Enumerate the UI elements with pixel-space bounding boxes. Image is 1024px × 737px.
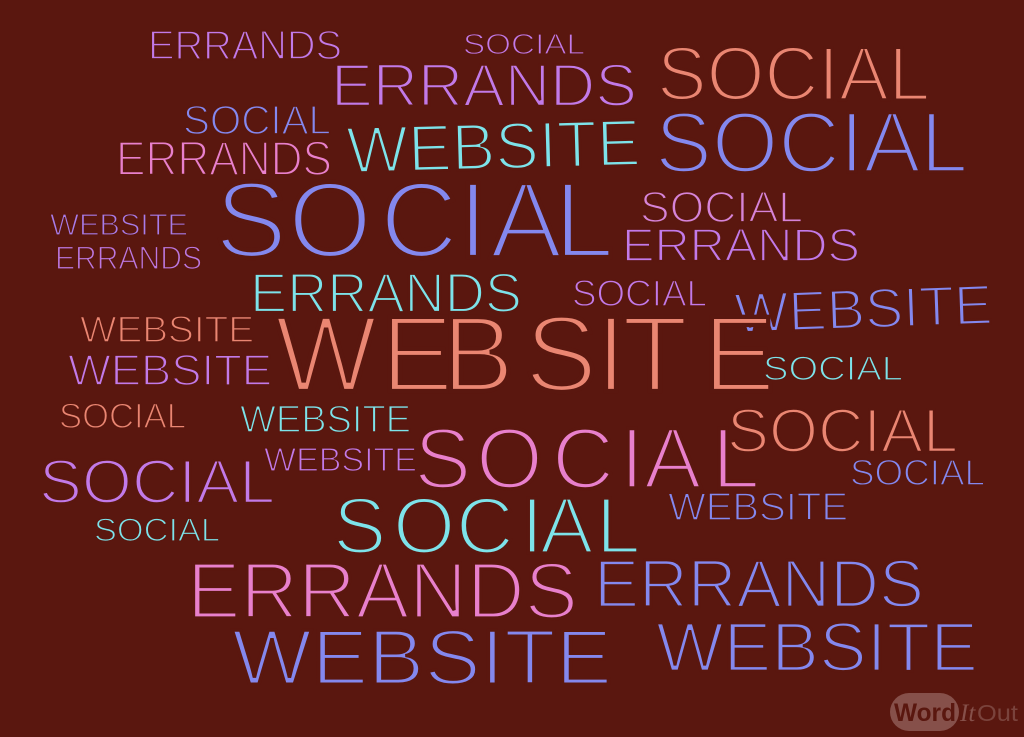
- word: SOCIAL: SOCIAL: [463, 29, 585, 61]
- word: ERRANDS large: ERRANDS: [331, 52, 637, 119]
- word: WEBSITE aqua: WEBSITE: [345, 105, 641, 187]
- word: SOCIAL purple left: SOCIAL: [39, 448, 275, 517]
- word: SOCIAL salmon small: SOCIAL: [59, 397, 186, 436]
- word: WEBSITE salmon largest: WEBSITE: [275, 293, 775, 414]
- word: ERRANDS aqua: ERRANDS: [250, 261, 522, 324]
- word: WEBSITE purple small: WEBSITE: [264, 441, 417, 478]
- word: SOCIAL aqua large: SOCIAL: [333, 481, 640, 570]
- logo: WordItOut: Out: [977, 700, 1019, 726]
- word: WEBSITE blue right: WEBSITE: [656, 608, 978, 686]
- word: WEBSITE blue large: WEBSITE: [232, 613, 612, 701]
- word: SOCIAL blue right: SOCIAL: [850, 452, 985, 493]
- word: SOCIAL aqua: SOCIAL: [763, 350, 903, 388]
- word: ERRANDS blue: ERRANDS: [594, 546, 924, 622]
- word: SOCIAL salmon: SOCIAL: [657, 32, 930, 117]
- word: WEBSITE blue small: WEBSITE: [668, 486, 848, 529]
- word: SOCIAL salmon right: SOCIAL: [727, 397, 958, 466]
- word: WEBSITE purple: WEBSITE: [68, 346, 272, 395]
- word: SOCIAL blue: SOCIAL: [655, 95, 968, 191]
- logo: WordItOut: It: [959, 700, 976, 727]
- word: WEBSITE blue: WEBSITE: [733, 273, 993, 344]
- word: WEBSITE small: WEBSITE: [50, 207, 188, 242]
- word: ERRANDS purple: ERRANDS: [622, 219, 860, 271]
- logo: WordItOut: [890, 693, 1019, 731]
- word: WEBSITE aqua small: WEBSITE: [240, 399, 411, 441]
- logo: WordItOut: Word: [894, 699, 956, 727]
- word: SOCIAL blue largest: SOCIAL: [215, 159, 614, 280]
- word: SOCIAL pink: SOCIAL: [414, 411, 760, 507]
- word: ERRANDS pink large: ERRANDS: [187, 546, 578, 635]
- word: ERRANDS: ERRANDS: [148, 22, 342, 68]
- word: SOCIAL purple: SOCIAL: [572, 273, 707, 314]
- word: SOCIAL aqua small: SOCIAL: [94, 512, 220, 548]
- word: ERRANDS small: ERRANDS: [55, 240, 202, 276]
- word: WEBSITE salmon small: WEBSITE: [80, 309, 254, 350]
- word: SOCIAL orchid: SOCIAL: [640, 183, 803, 232]
- word: SOCIAL blue small: SOCIAL: [183, 97, 331, 143]
- word: ERRANDS pink: ERRANDS: [116, 133, 332, 186]
